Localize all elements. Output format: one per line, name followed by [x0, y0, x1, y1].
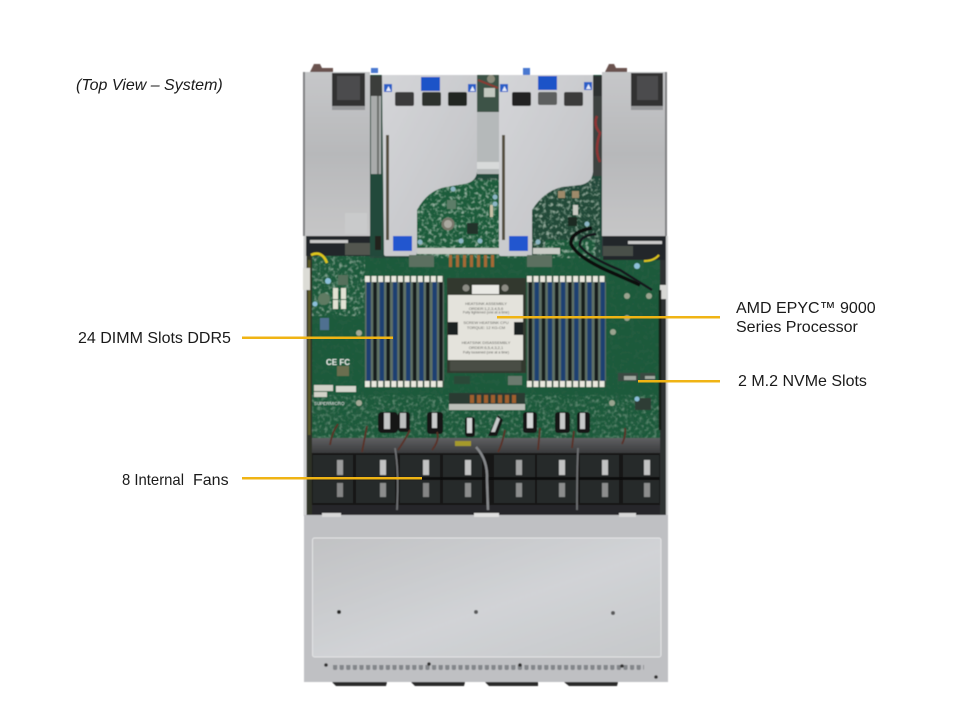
right riser [499, 75, 593, 256]
blue rear tabs [371, 68, 530, 75]
caption: top view: (Top View – System) [76, 77, 223, 94]
board components under risers [375, 186, 590, 267]
CPU socket and heatsink: Fully loosened (one at a time) [463, 350, 509, 354]
8 internal fans [312, 447, 660, 516]
front feet [332, 682, 618, 686]
CPU socket and heatsink: ORDER:1,2,3,4,5,6 [469, 306, 504, 311]
red cable by right riser [596, 116, 600, 162]
callout: processor [497, 300, 876, 336]
fan cable connectors [330, 412, 625, 452]
side rails [306, 236, 312, 516]
system top view photo [303, 64, 668, 686]
rear handles [310, 64, 627, 72]
CPU socket and heatsink: ORDER:6,5,4,3,2,1 [469, 345, 504, 350]
callout: 8 internal fans [122, 472, 422, 489]
callout: 8 internal fans: 8 Internal [122, 472, 184, 489]
DIMM slots right bank [527, 276, 606, 387]
motherboard [312, 256, 660, 438]
orange capacitors row top [449, 255, 494, 267]
callout: M.2 NVMe slots: 2 M.2 NVMe Slots [738, 373, 867, 390]
callout: processor: AMD EPYC™ 9000 [736, 300, 876, 317]
CPU socket and heatsink: TORQUE: 12 KG-CM [467, 325, 505, 330]
CPU socket and heatsink: HEATSINK ASSEMBLY [465, 301, 507, 306]
CPU socket and heatsink: SCREW HEATSINK CPU [463, 320, 509, 325]
DIMM slots left bank [365, 276, 444, 387]
chassis base [305, 76, 667, 516]
black cables right [571, 228, 640, 285]
right board details [609, 293, 655, 410]
rear cover panel [304, 513, 668, 682]
board texture [312, 178, 660, 438]
left riser [382, 75, 477, 256]
left rear board details: CE FC [326, 358, 350, 367]
CPU socket and heatsink: Fully tightened (one at a time) [463, 310, 509, 314]
callout: processor: Series Processor [736, 319, 858, 336]
left power supply [303, 72, 370, 263]
left rear board details [312, 275, 362, 406]
CPU socket and heatsink [447, 278, 526, 373]
VRM row below CPU [449, 376, 525, 410]
center airflow gap [477, 112, 499, 174]
CPU socket and heatsink: HEATSINK DISASSEMBLY [462, 340, 511, 345]
callout: 8 internal fans: Fans [193, 472, 229, 489]
callout: 24 DIMM slots: 24 DIMM Slots DDR5 [78, 330, 231, 347]
left rear board details: SUPERMICRO [314, 401, 345, 406]
fan tray shroud [312, 438, 660, 453]
rear gap strips beside risers [370, 76, 382, 96]
right power supply [602, 72, 667, 269]
